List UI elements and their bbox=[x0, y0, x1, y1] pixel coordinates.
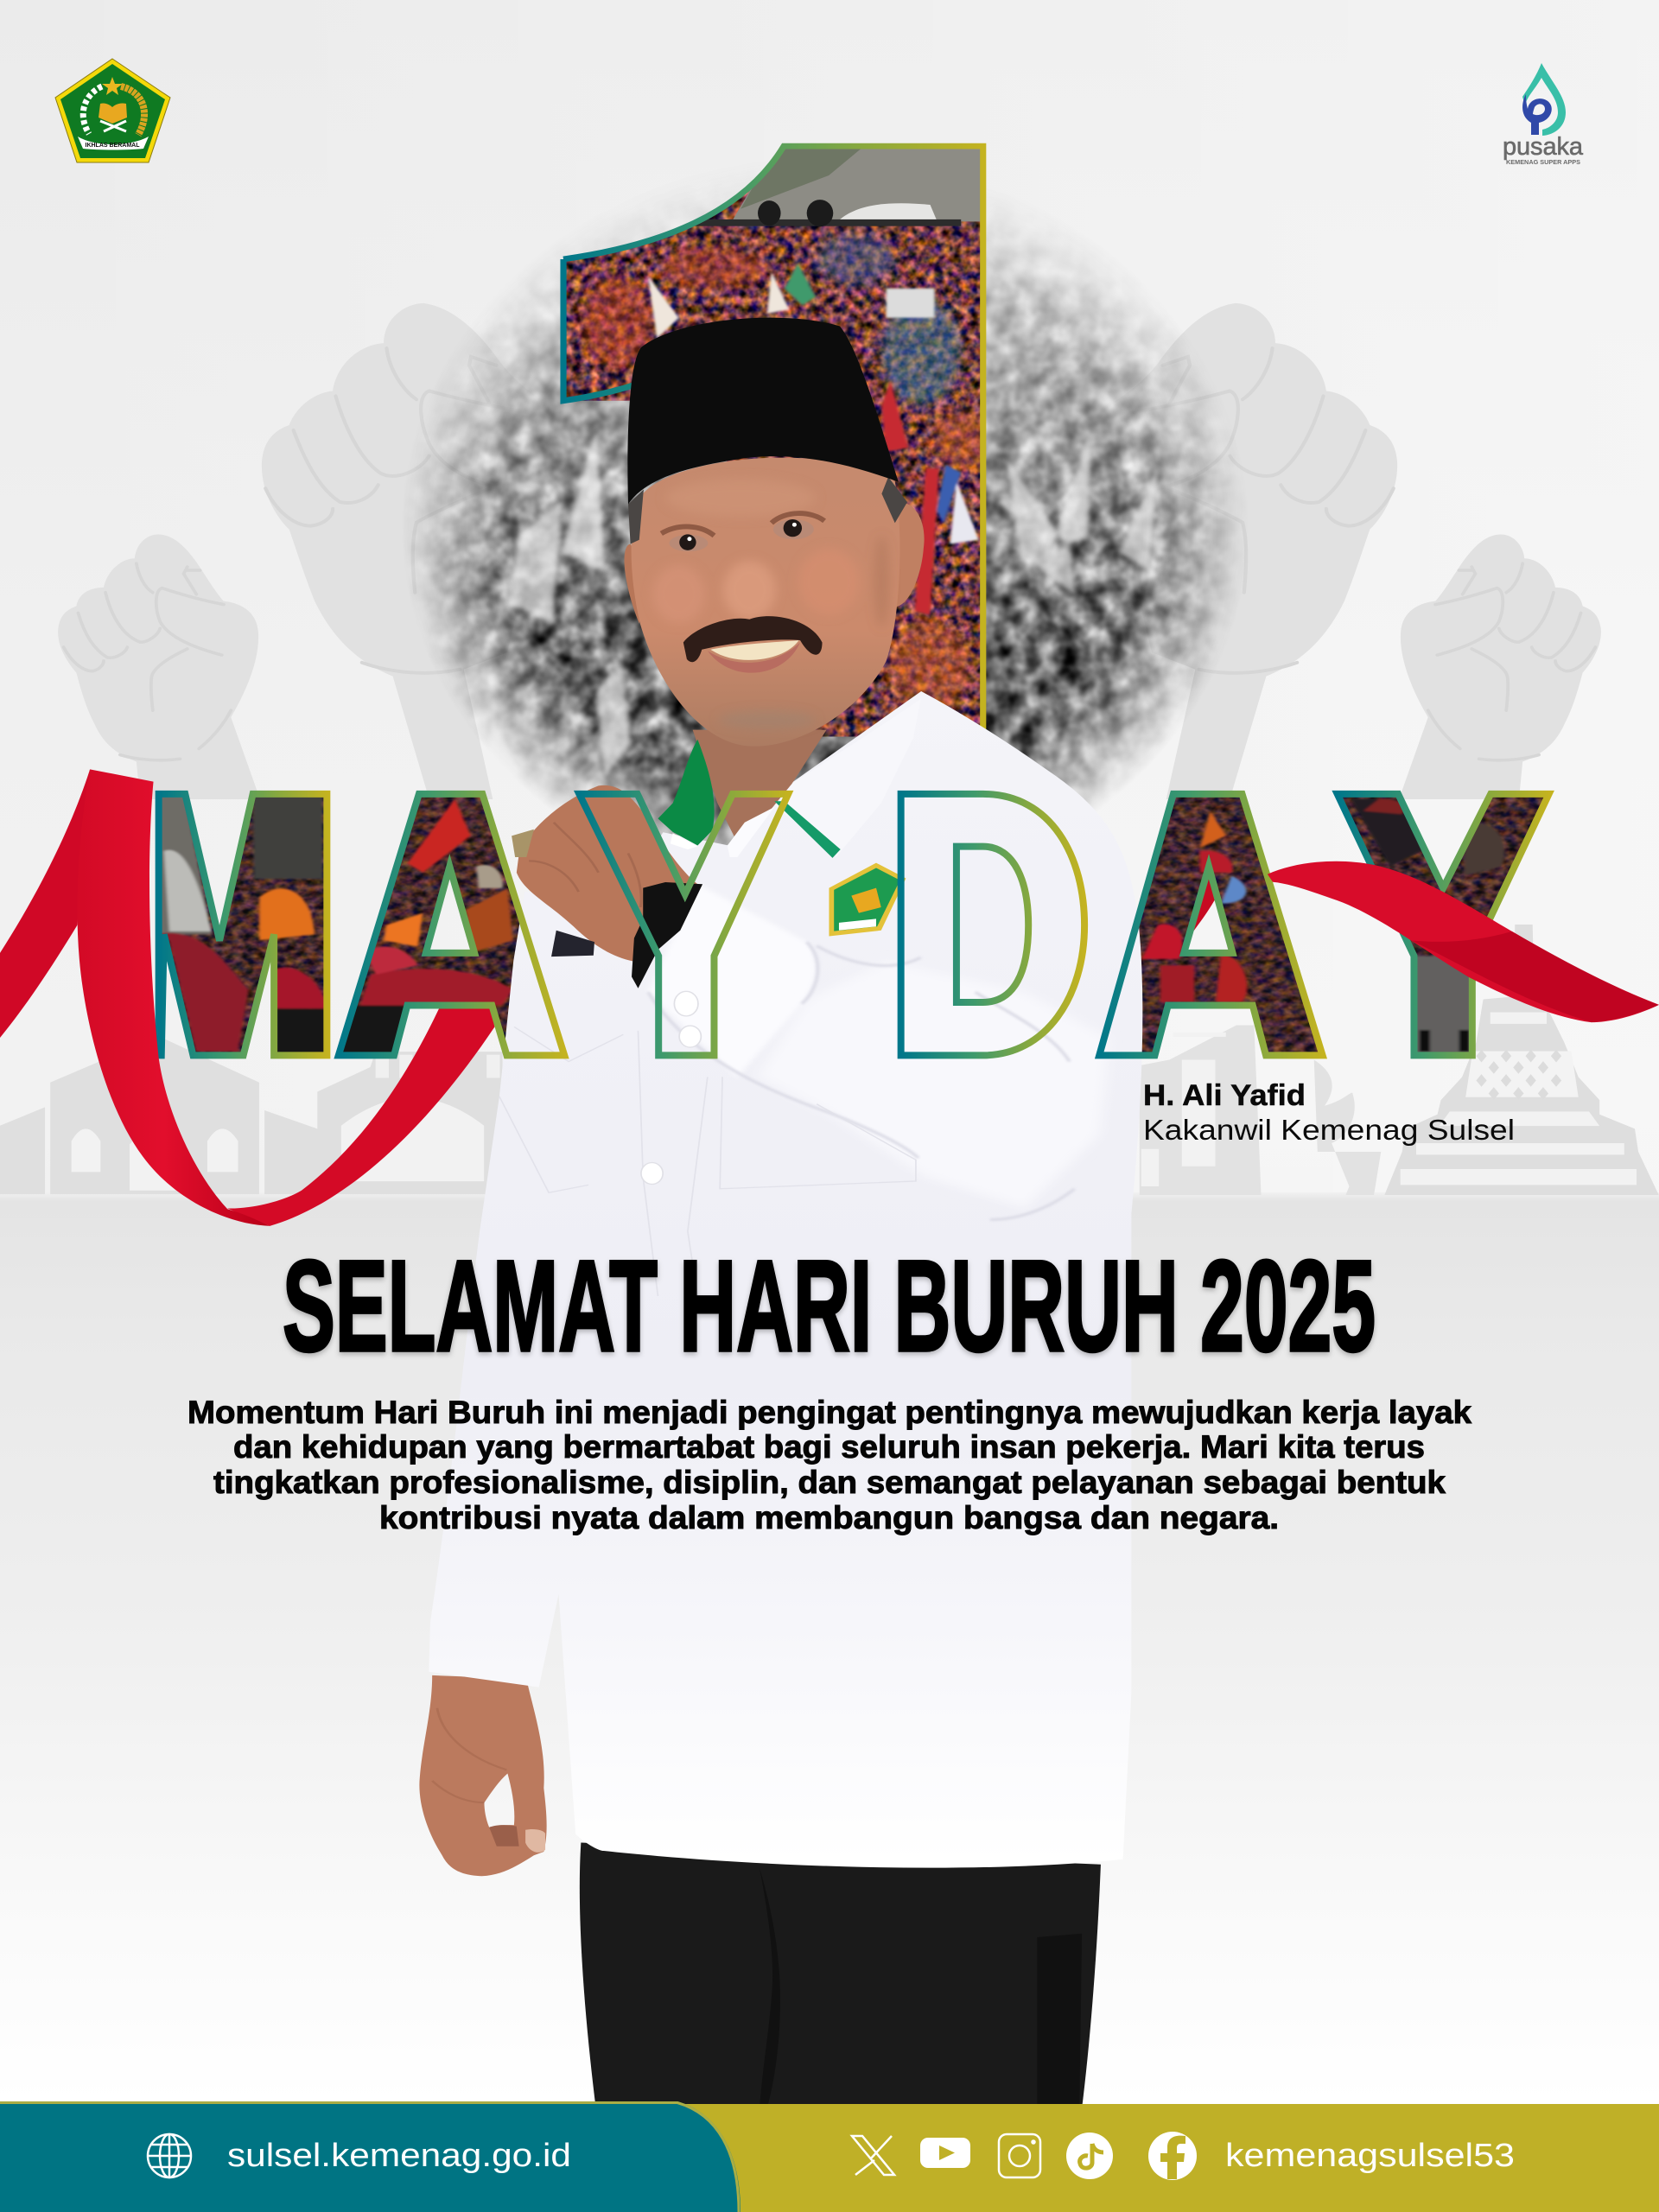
green collar left bbox=[658, 740, 715, 846]
name tag bbox=[551, 931, 594, 957]
ring bbox=[512, 830, 534, 857]
ribbon sliver inside A counter bbox=[1193, 876, 1217, 931]
cotton branch bbox=[83, 86, 102, 134]
book bbox=[99, 103, 127, 124]
buttons bbox=[641, 991, 701, 1184]
cap bbox=[627, 318, 899, 505]
stupa bbox=[1384, 925, 1659, 1195]
left collar edge bbox=[671, 833, 697, 849]
face shading bbox=[652, 479, 890, 729]
numeral 1 with colour crowd photo bbox=[560, 142, 988, 741]
MAY letter outlines bbox=[159, 794, 788, 1055]
letter Y bbox=[579, 794, 788, 1055]
ribbon right strand bbox=[1268, 861, 1659, 1022]
message paragraph bbox=[188, 1395, 1471, 1535]
crowd photo in grayscale bbox=[408, 200, 1239, 845]
lower hand bbox=[419, 1675, 547, 1876]
icon: TikTok bbox=[1066, 2133, 1113, 2179]
eyes bbox=[669, 519, 814, 551]
crowd photo inside numeral bbox=[560, 142, 988, 741]
message paragraph: kontribusi nyata dalam membangun bangsa dan negara. bbox=[379, 1500, 1279, 1535]
droplet bbox=[1522, 63, 1566, 136]
footer left tab bbox=[0, 2101, 741, 2212]
letter Y bbox=[1338, 794, 1549, 1055]
star bbox=[102, 77, 123, 95]
MAY letters photo fill bbox=[162, 797, 520, 1052]
pants bbox=[580, 1843, 1101, 2108]
wordmark: pusaka bbox=[1503, 133, 1584, 161]
brows bbox=[661, 513, 824, 536]
person bbox=[419, 318, 1142, 2108]
raised fists left bbox=[58, 303, 568, 799]
icon: Facebook bbox=[1148, 2132, 1197, 2180]
neck bbox=[693, 730, 827, 848]
website: sulsel.kemenag.go.id bbox=[227, 2138, 571, 2174]
icon: Instagram bbox=[999, 2134, 1040, 2177]
tagline: KEMENAG SUPER APPS bbox=[1506, 158, 1580, 166]
ribbon left loop bbox=[0, 769, 270, 1226]
DAY letters photo fill bbox=[1139, 797, 1543, 1052]
message paragraph: dan kehidupan yang bermartabat bagi seluruh insan pekerja. Mari kita terus bbox=[233, 1429, 1425, 1465]
letter A bbox=[339, 794, 564, 1055]
motto scroll: IKHLAS BERAMAL bbox=[85, 143, 140, 149]
hair bbox=[628, 477, 907, 544]
letter A bbox=[1099, 794, 1323, 1055]
shirt folds and sleeve bbox=[499, 699, 1109, 1296]
message paragraph: Momentum Hari Buruh ini menjadi pengingat pentingnya mewujudkan kerja layak bbox=[188, 1395, 1471, 1430]
letter D bbox=[901, 794, 1084, 1055]
ear left bbox=[625, 544, 648, 624]
face bbox=[632, 458, 899, 747]
lower lip bbox=[708, 642, 800, 673]
letter M bbox=[159, 794, 327, 1055]
numeral outline bbox=[563, 146, 983, 737]
social handle: kemenagsulsel53 bbox=[1225, 2138, 1515, 2174]
green collar right strip bbox=[774, 801, 841, 858]
inner placket bbox=[728, 807, 774, 857]
mosque silhouettes left bbox=[0, 1036, 534, 1194]
icon: globe bbox=[148, 2134, 191, 2177]
DAY letter outlines bbox=[901, 794, 1549, 1055]
name caption bbox=[1143, 1079, 1515, 1146]
message paragraph: tingkatkan profesionalisme, disiplin, dan semangat pelayanan sebagai bentuk bbox=[213, 1465, 1446, 1500]
logo Pusaka bbox=[1503, 63, 1584, 166]
raised fists right bbox=[1091, 303, 1601, 799]
head bbox=[625, 318, 925, 747]
icon: YouTube bbox=[920, 2138, 970, 2168]
teeth bbox=[710, 640, 798, 660]
footer right band bbox=[0, 2104, 1659, 2212]
flame ornament bbox=[1314, 1059, 1381, 1195]
shirt badge bbox=[829, 863, 906, 936]
gate bbox=[1140, 1026, 1262, 1195]
position: Kakanwil Kemenag Sulsel bbox=[1143, 1114, 1515, 1146]
rice stalk bbox=[121, 86, 144, 135]
moustache bbox=[683, 616, 823, 662]
logo Kemenag bbox=[55, 59, 170, 162]
icon: X bbox=[852, 2136, 894, 2175]
right collar bbox=[772, 699, 921, 856]
temple silhouettes right bbox=[1140, 925, 1659, 1195]
shirt bbox=[429, 691, 1142, 1868]
raised fist bbox=[517, 785, 697, 961]
name: H. Ali Yafid bbox=[1143, 1079, 1306, 1112]
ribbon strand behind letter A bbox=[227, 1006, 494, 1226]
watch bbox=[632, 882, 702, 988]
footer bbox=[0, 2101, 1659, 2212]
ear right bbox=[881, 503, 925, 607]
